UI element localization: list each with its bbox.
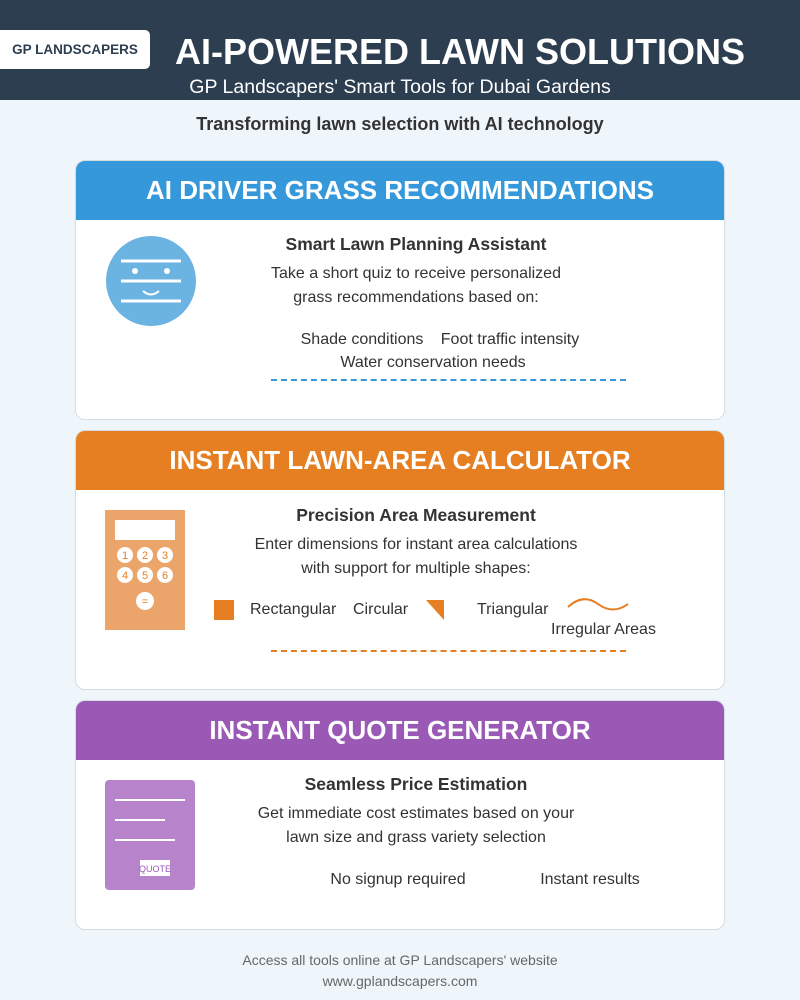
panel: area calculator xyxy=(75,430,725,690)
footer: Access all tools online at GP Landscapers' website xyxy=(242,952,558,968)
logo badge xyxy=(0,30,150,69)
logo badge: GP LANDSCAPERS xyxy=(12,42,138,57)
panel: area calculator: Irregular Areas xyxy=(551,621,656,638)
panel heading: INSTANT LAWN-AREA CALCULATOR xyxy=(169,445,631,475)
panel: area calculator: Triangular xyxy=(477,601,548,618)
panel: quote generator: lawn size and grass variety selection xyxy=(286,829,546,846)
panel heading xyxy=(76,701,724,760)
icon: calculator: 4 xyxy=(122,570,128,582)
icon: quote document xyxy=(105,780,195,890)
icon: calculator: = xyxy=(142,596,148,608)
icon: calculator: 1 xyxy=(122,550,128,562)
header banner xyxy=(0,0,800,100)
icon: face xyxy=(106,236,196,326)
text block: Smart Lawn Planning Assistant xyxy=(286,234,546,254)
panel: quote generator xyxy=(75,700,725,930)
panel: grass recommendations: Water conservation needs xyxy=(340,354,526,371)
panel heading xyxy=(76,161,724,220)
icon: calculator xyxy=(105,510,185,630)
shapes legend xyxy=(214,600,234,620)
text block: Precision Area Measurement xyxy=(296,505,536,525)
panel heading: INSTANT QUOTE GENERATOR xyxy=(209,715,591,745)
panel: grass recommendations: Take a short quiz to receive personalized xyxy=(271,265,561,282)
panel: area calculator: with support for multiple shapes: xyxy=(301,560,531,577)
panel: area calculator: Rectangular xyxy=(250,601,336,618)
title: AI-POWERED LAWN SOLUTIONS xyxy=(175,31,745,72)
icon: calculator: 6 xyxy=(162,570,168,582)
icon: quote document: QUOTE xyxy=(139,864,171,874)
text block: Seamless Price Estimation xyxy=(305,774,527,794)
panel: grass recommendations: Shade conditions xyxy=(301,331,423,348)
panel: grass recommendations: grass recommendations based on: xyxy=(293,289,539,306)
panel: quote generator: No signup required xyxy=(330,871,466,888)
panel: area calculator: Enter dimensions for instant area calculations xyxy=(255,536,577,553)
panel: grass recommendations xyxy=(75,160,725,420)
subtitle: GP Landscapers' Smart Tools for Dubai Gardens xyxy=(189,76,611,98)
panel: quote generator: Get immediate cost estimates based on your xyxy=(258,805,574,822)
panel: area calculator: Circular xyxy=(353,601,408,618)
panel heading: AI DRIVER GRASS RECOMMENDATIONS xyxy=(146,175,654,205)
panel heading xyxy=(76,431,724,490)
panel: quote generator: Instant results xyxy=(540,871,640,888)
panel: grass recommendations: Foot traffic intensity xyxy=(441,331,579,348)
footer xyxy=(242,952,558,989)
footer: www.gplandscapers.com xyxy=(323,973,477,989)
icon: calculator: 3 xyxy=(162,550,168,562)
icon: calculator: 2 xyxy=(142,550,148,562)
icon: calculator: 5 xyxy=(142,570,148,582)
tagline: Transforming lawn selection with AI technology xyxy=(196,114,604,134)
